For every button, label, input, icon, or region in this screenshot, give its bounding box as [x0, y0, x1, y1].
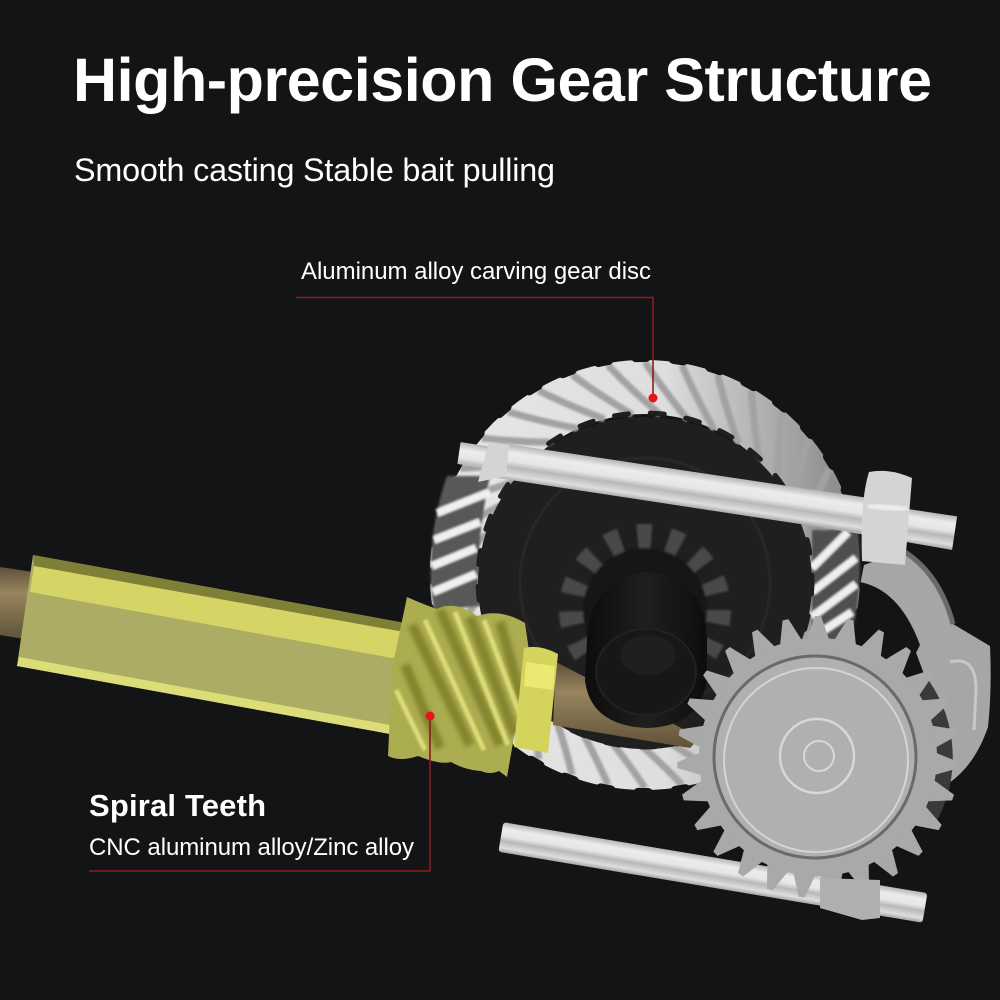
hex main face — [17, 555, 405, 734]
ring spiral stripes — [404, 334, 886, 816]
ring body — [457, 387, 833, 763]
small pinion gear — [571, 536, 719, 684]
bracket outer edge — [905, 552, 953, 624]
silver bracket — [860, 550, 991, 783]
bracket inner detail — [950, 661, 976, 730]
ring outer scallops — [427, 357, 863, 793]
silver spur gear — [620, 598, 970, 959]
rod support block — [478, 442, 509, 482]
inner disc scallops — [478, 413, 812, 747]
hex lower highlight — [17, 657, 390, 734]
worm body — [388, 597, 529, 777]
gear tooth shadow — [921, 685, 944, 820]
yellow hex shaft — [17, 555, 405, 734]
black tube — [585, 572, 707, 728]
hex upper highlight — [30, 566, 404, 658]
hex socket — [804, 741, 834, 771]
rod thin section — [456, 442, 957, 550]
subtitle: Smooth casting Stable bait pulling — [74, 152, 555, 188]
brown front shaft — [553, 662, 700, 748]
gear raised face — [714, 656, 916, 858]
callout dot — [426, 712, 434, 720]
rod clamp block — [820, 878, 880, 920]
callout: gear disc — [296, 258, 658, 402]
bevel gear disc — [404, 334, 886, 816]
callout: spiral teeth — [89, 712, 434, 871]
heading: Spiral Teeth — [89, 788, 266, 823]
lower steel rod — [498, 822, 927, 923]
worm helical highlights — [396, 612, 520, 750]
worm helical grooves — [405, 610, 522, 748]
bracket inner gap — [860, 582, 920, 680]
leader line — [89, 716, 430, 871]
right dark tooth section — [812, 530, 860, 640]
yellow collar — [514, 647, 558, 753]
gear body — [699, 638, 937, 876]
upper steel rod — [456, 437, 958, 550]
title: High-precision Gear Structure — [73, 46, 932, 114]
lock collar — [862, 471, 912, 565]
gear teeth — [620, 598, 970, 959]
tube bore — [620, 635, 676, 675]
left dark tooth section — [431, 476, 490, 610]
hex top dark edge — [33, 555, 405, 632]
tube opening — [596, 629, 696, 715]
gear face ring — [724, 668, 908, 852]
callout label: Aluminum alloy carving gear disc — [301, 258, 651, 285]
callout leader line — [296, 298, 653, 398]
description: CNC aluminum alloy/Zinc alloy — [89, 834, 414, 861]
disc grooves — [520, 458, 770, 708]
rod thick section — [491, 442, 878, 535]
spiral worm gear — [388, 597, 529, 777]
gear hub — [780, 719, 854, 793]
brown rear shaft — [0, 567, 40, 640]
dark inner disc — [478, 417, 812, 749]
callout dot — [648, 394, 658, 402]
